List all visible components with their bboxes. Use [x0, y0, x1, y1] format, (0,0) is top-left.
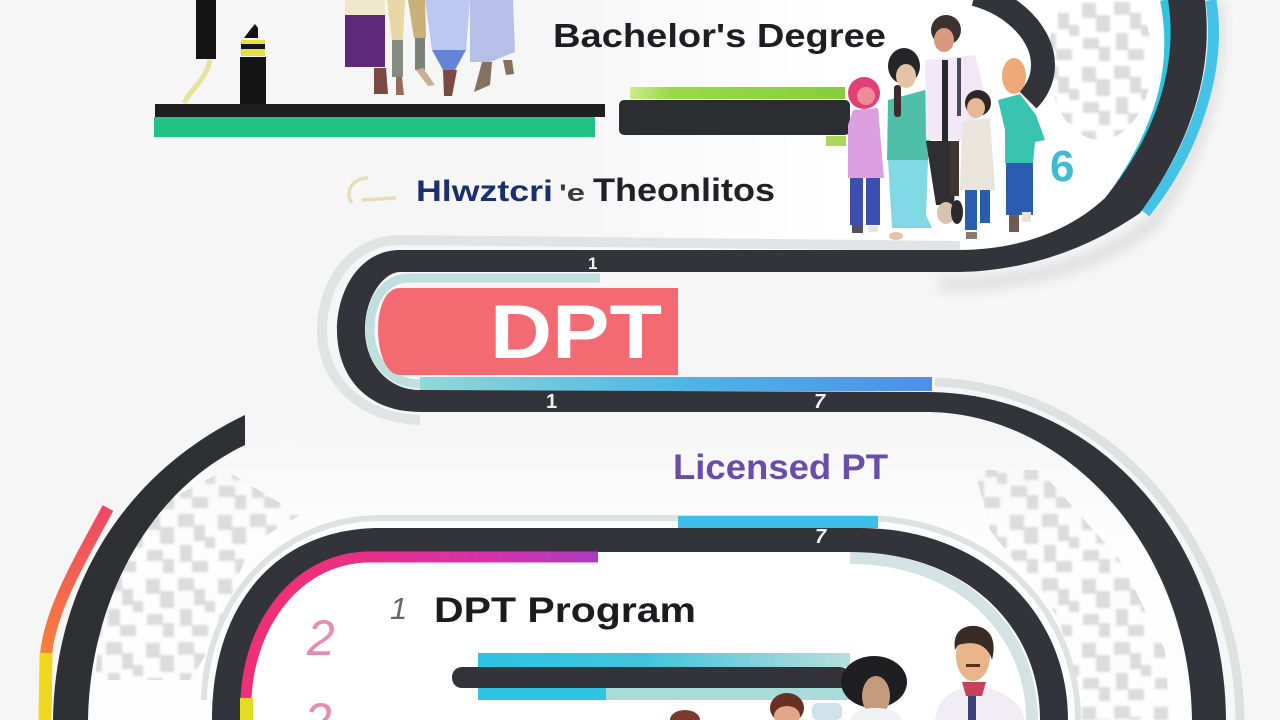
track: blue band [420, 377, 932, 391]
text: black garbled label: Theonlitos [593, 172, 775, 208]
illustration: family [848, 15, 1045, 240]
number: italic 1: 1 [390, 591, 407, 626]
heading: Bachelor's Degree: Bachelor's Degree [553, 17, 886, 54]
soft shadow of upper track [940, 0, 1217, 284]
track: pink purple band [246, 557, 598, 698]
track: yellow band lower loop [240, 698, 253, 720]
track: upper inner arc [975, 0, 1043, 100]
track: lower inner loop [212, 528, 1068, 720]
track: pale band inside lower loop right [850, 558, 1032, 720]
track: upper accent outer blue [1145, 0, 1213, 213]
person: man with moustache [935, 626, 1025, 720]
person: child head [770, 693, 804, 720]
icon: pale mark [349, 178, 396, 203]
panel: lower white area [88, 412, 1192, 720]
panel: lower loop interior [240, 552, 1040, 720]
icon: black post [196, 0, 216, 59]
halo around lower loop [204, 518, 1078, 720]
person: woman with dark hair [841, 656, 907, 720]
number: pink 2: 2 [306, 610, 335, 666]
person: older relative in teal jacket [998, 58, 1045, 232]
heading: DPT: DPT [490, 290, 662, 375]
icon: bottle [240, 24, 266, 104]
heading: DPT Program: DPT Program [434, 591, 696, 630]
number: 6: 6 [1050, 142, 1074, 191]
person: tall man [925, 15, 985, 224]
heading: Licensed PT: Licensed PT [673, 448, 888, 487]
halo around DPT loop [322, 240, 960, 420]
track: main dark serpentine [337, 0, 1226, 720]
track: upper accent inner cyan [1112, 0, 1168, 196]
text: apostrophe e: 'e [559, 180, 585, 207]
panel: DPT box [378, 288, 678, 375]
text: blue garbled label: Hlwztcri [416, 175, 553, 208]
bar: lime [630, 87, 845, 99]
marks on track: 7 [815, 526, 827, 548]
person: girl in teal [887, 48, 932, 240]
track: red orange accent [46, 508, 108, 655]
bar: cyan bottom left [478, 687, 606, 700]
track: teal DPT loop inner band [370, 278, 600, 384]
icon: yellow cord [184, 60, 210, 103]
panel: upper white area [560, 0, 1171, 250]
bar: green [154, 117, 595, 137]
marks on track: 1 [588, 254, 597, 273]
person: child with backpack [960, 90, 995, 239]
pattern: top right checker [1050, 1, 1150, 140]
person: pale blue shoulder [812, 703, 842, 720]
bar: pale teal bottom right [606, 687, 850, 700]
track: yellow accent [45, 653, 46, 720]
bar: dark centre [619, 100, 850, 135]
marks on track: 7 [814, 391, 826, 413]
halo along right of long track [935, 382, 1240, 720]
bar: cyan top [478, 653, 850, 667]
person: small head [670, 710, 700, 720]
bar: top dark [155, 104, 605, 117]
bar: lime small [826, 136, 846, 146]
bar: lower dark [452, 667, 850, 688]
illustration: top group legs [345, 0, 515, 96]
marks on track: 1 [546, 391, 557, 413]
person: pink hair child [848, 77, 884, 233]
track: lower left outer arc [53, 415, 245, 720]
pattern: lower left checker [96, 474, 300, 680]
illustration: lower group [670, 626, 1025, 720]
pattern: lower right checker [970, 465, 1175, 720]
marks on track [546, 254, 827, 548]
track: blue accent above lower loop [678, 516, 878, 528]
